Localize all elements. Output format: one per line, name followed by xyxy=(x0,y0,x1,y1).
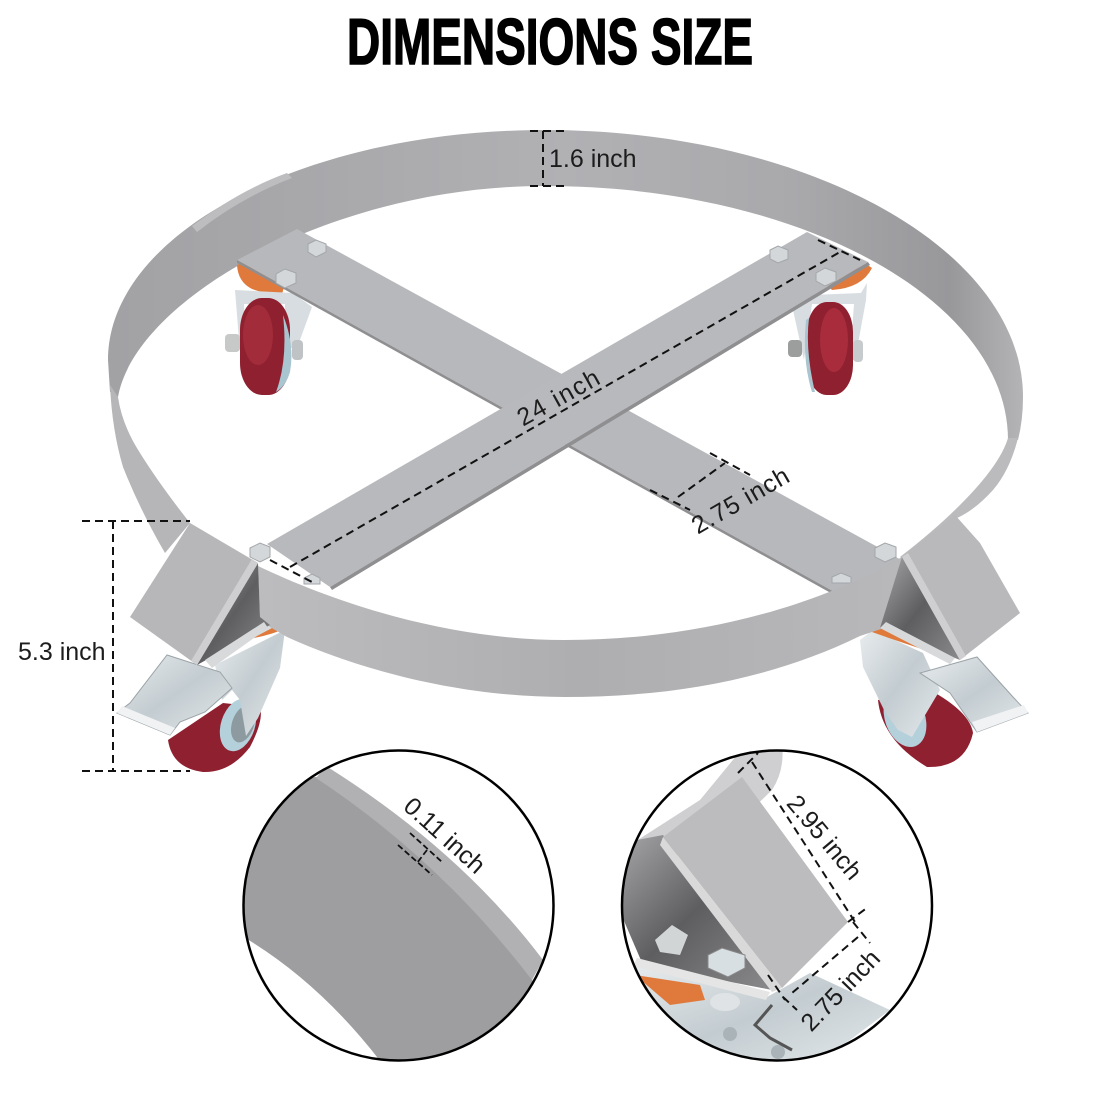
dimension: diameter 24 inch xyxy=(270,240,860,582)
wheel xyxy=(168,703,261,772)
dimension: bar width 2.75 inch: 2.75 inch xyxy=(687,462,794,540)
ring plate close-up xyxy=(230,766,543,1070)
ring: left front segment xyxy=(110,385,190,553)
front left caster xyxy=(117,620,285,772)
ring seam tab xyxy=(192,173,292,232)
label 2.95 inch: 2.95 inch xyxy=(781,790,868,886)
swivel plate xyxy=(228,622,282,640)
ring: rear inner face xyxy=(108,130,1023,440)
right bracket xyxy=(880,515,1020,664)
bracket dimension dashes xyxy=(738,753,870,1010)
detail circle: bracket xyxy=(615,745,932,1065)
hub xyxy=(876,683,934,753)
rear right caster xyxy=(788,264,872,395)
ring: right front segment xyxy=(900,438,1018,560)
fork xyxy=(215,630,285,736)
dimension: bar width 2.75 inch xyxy=(650,453,794,540)
lock pedal xyxy=(117,655,232,735)
cross bar: lower left to upper right xyxy=(267,232,868,587)
detail circle: thickness xyxy=(230,750,554,1070)
dimension: band height 1.6 inch: 1.6 inch xyxy=(549,145,637,173)
bolt group xyxy=(250,240,896,584)
thickness dashes xyxy=(398,833,442,875)
fork xyxy=(235,290,312,352)
thickness label: 0.11 inch xyxy=(398,792,491,879)
top plate xyxy=(200,620,272,662)
lock pedal xyxy=(920,657,1028,732)
title: DIMENSIONS SIZE xyxy=(347,5,753,78)
dimension: diameter 24 inch: 24 inch xyxy=(512,364,605,432)
dimension: band height 1.6 inch xyxy=(530,131,637,186)
label 2.75 inch: 2.75 inch xyxy=(795,944,886,1037)
cross bar: upper left to lower right xyxy=(237,229,905,594)
fork xyxy=(793,283,867,360)
ring: front outer face xyxy=(258,557,902,697)
dimension: caster height 5.3 inch: 5.3 inch xyxy=(18,638,106,666)
rear left caster xyxy=(225,262,312,395)
wheel xyxy=(240,298,290,395)
axle nuts xyxy=(225,334,240,352)
dimension: caster height 5.3 inch xyxy=(18,521,190,771)
wheel xyxy=(878,690,973,767)
top plate xyxy=(880,622,955,664)
swivel plate xyxy=(237,262,285,294)
front right caster xyxy=(860,622,1028,767)
wheel xyxy=(807,302,853,395)
dolly product illustration xyxy=(108,130,1028,772)
fork xyxy=(860,630,940,737)
swivel plate xyxy=(826,264,872,290)
axle nuts xyxy=(788,340,802,357)
hub xyxy=(213,694,263,756)
left bracket xyxy=(130,523,270,668)
swivel plate xyxy=(872,625,925,650)
bracket close-up xyxy=(615,745,890,1065)
